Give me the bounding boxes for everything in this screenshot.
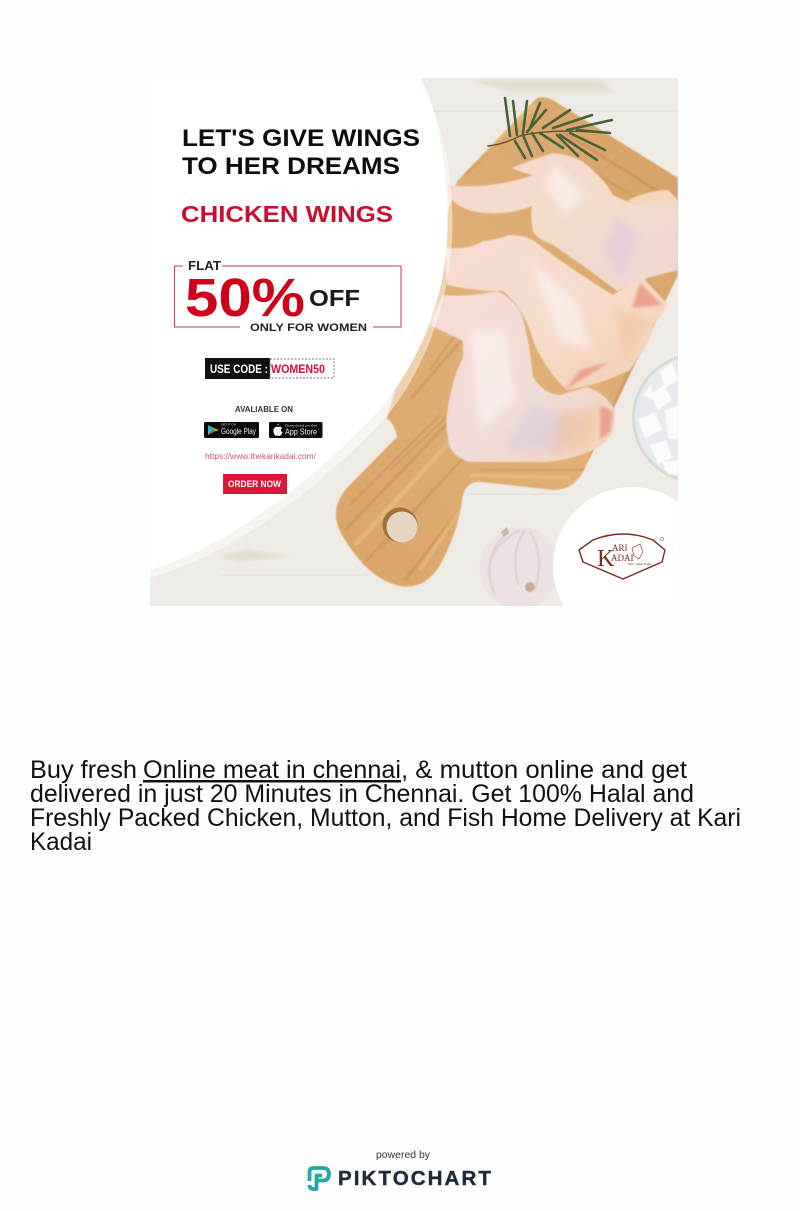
logo: Kari Kadai: "Eat - Meat Today" xyxy=(628,562,653,566)
heading: let's give wings xyxy=(182,125,420,180)
wing shading xyxy=(505,215,640,450)
promo code xyxy=(205,358,334,379)
panel: promotional image xyxy=(150,78,678,606)
icon: rosemary sprig xyxy=(488,98,612,160)
offer box: FLAT xyxy=(188,258,221,273)
icon: chicken wing middle xyxy=(445,235,668,390)
body text xyxy=(30,756,741,856)
logo: Kari Kadai xyxy=(579,534,665,579)
available on label: AVALIABLE ON xyxy=(235,405,293,414)
heading: let's give wings: LET'S GIVE WINGS xyxy=(182,125,420,152)
icon: cutting board xyxy=(336,97,680,587)
app store badge: App Store xyxy=(285,428,317,436)
logo: Kari Kadai: ADAI xyxy=(611,553,634,563)
app store badge: Download on the xyxy=(285,424,317,428)
icon: garlic bulb xyxy=(486,527,542,597)
wing tip skin xyxy=(628,190,678,206)
logo: Kari Kadai: K xyxy=(597,546,615,572)
offer box xyxy=(174,258,401,334)
offer box: 50% xyxy=(185,268,305,328)
google play badge: GET IT ON xyxy=(221,422,236,426)
piktochart wordmark: PIKTOCHART xyxy=(338,1168,493,1190)
button: order now xyxy=(223,474,287,494)
logo: Kari Kadai: ARI xyxy=(612,543,628,553)
icon: chicken wing lower xyxy=(430,291,615,462)
website url: https://www.thekarikadai.com/ xyxy=(205,451,317,461)
google play badge xyxy=(204,422,259,438)
google play badge: Google Play xyxy=(221,427,256,436)
promo code: WOMEN50 xyxy=(271,362,325,376)
heading: let's give wings: TO HER DREAMS xyxy=(182,153,400,180)
body text: Kadai xyxy=(30,828,92,856)
body text: Freshly Packed Chicken, Mutton, and Fish Home Delivery at Kari xyxy=(30,804,741,832)
powered by label: powered by xyxy=(376,1149,431,1161)
table plank lines xyxy=(220,111,678,575)
board hole xyxy=(382,508,418,542)
app store badge xyxy=(269,422,322,438)
offer box: OFF xyxy=(309,285,360,311)
logo circle xyxy=(553,487,678,606)
icon: piktochart logo xyxy=(310,1168,329,1189)
offer box: ONLY FOR WOMEN xyxy=(250,322,367,334)
white curved panel edge xyxy=(150,78,453,578)
body text: delivered in just 20 Minutes in Chennai. Get 100% Halal and xyxy=(30,780,694,808)
icon: chicken wing top xyxy=(447,153,678,291)
body text: Online meat in chennai xyxy=(143,756,401,784)
table stain xyxy=(218,80,615,562)
body text: , & mutton online and get xyxy=(401,756,687,784)
wooden table background xyxy=(150,78,678,606)
white curved panel xyxy=(150,78,448,570)
heading: chicken wings: CHICKEN WINGS xyxy=(181,201,393,227)
icon: bowl of salt xyxy=(632,356,678,480)
button: order now: ORDER NOW xyxy=(228,479,281,489)
promo code: USE CODE : xyxy=(210,362,268,376)
body text: Buy fresh xyxy=(30,756,137,784)
